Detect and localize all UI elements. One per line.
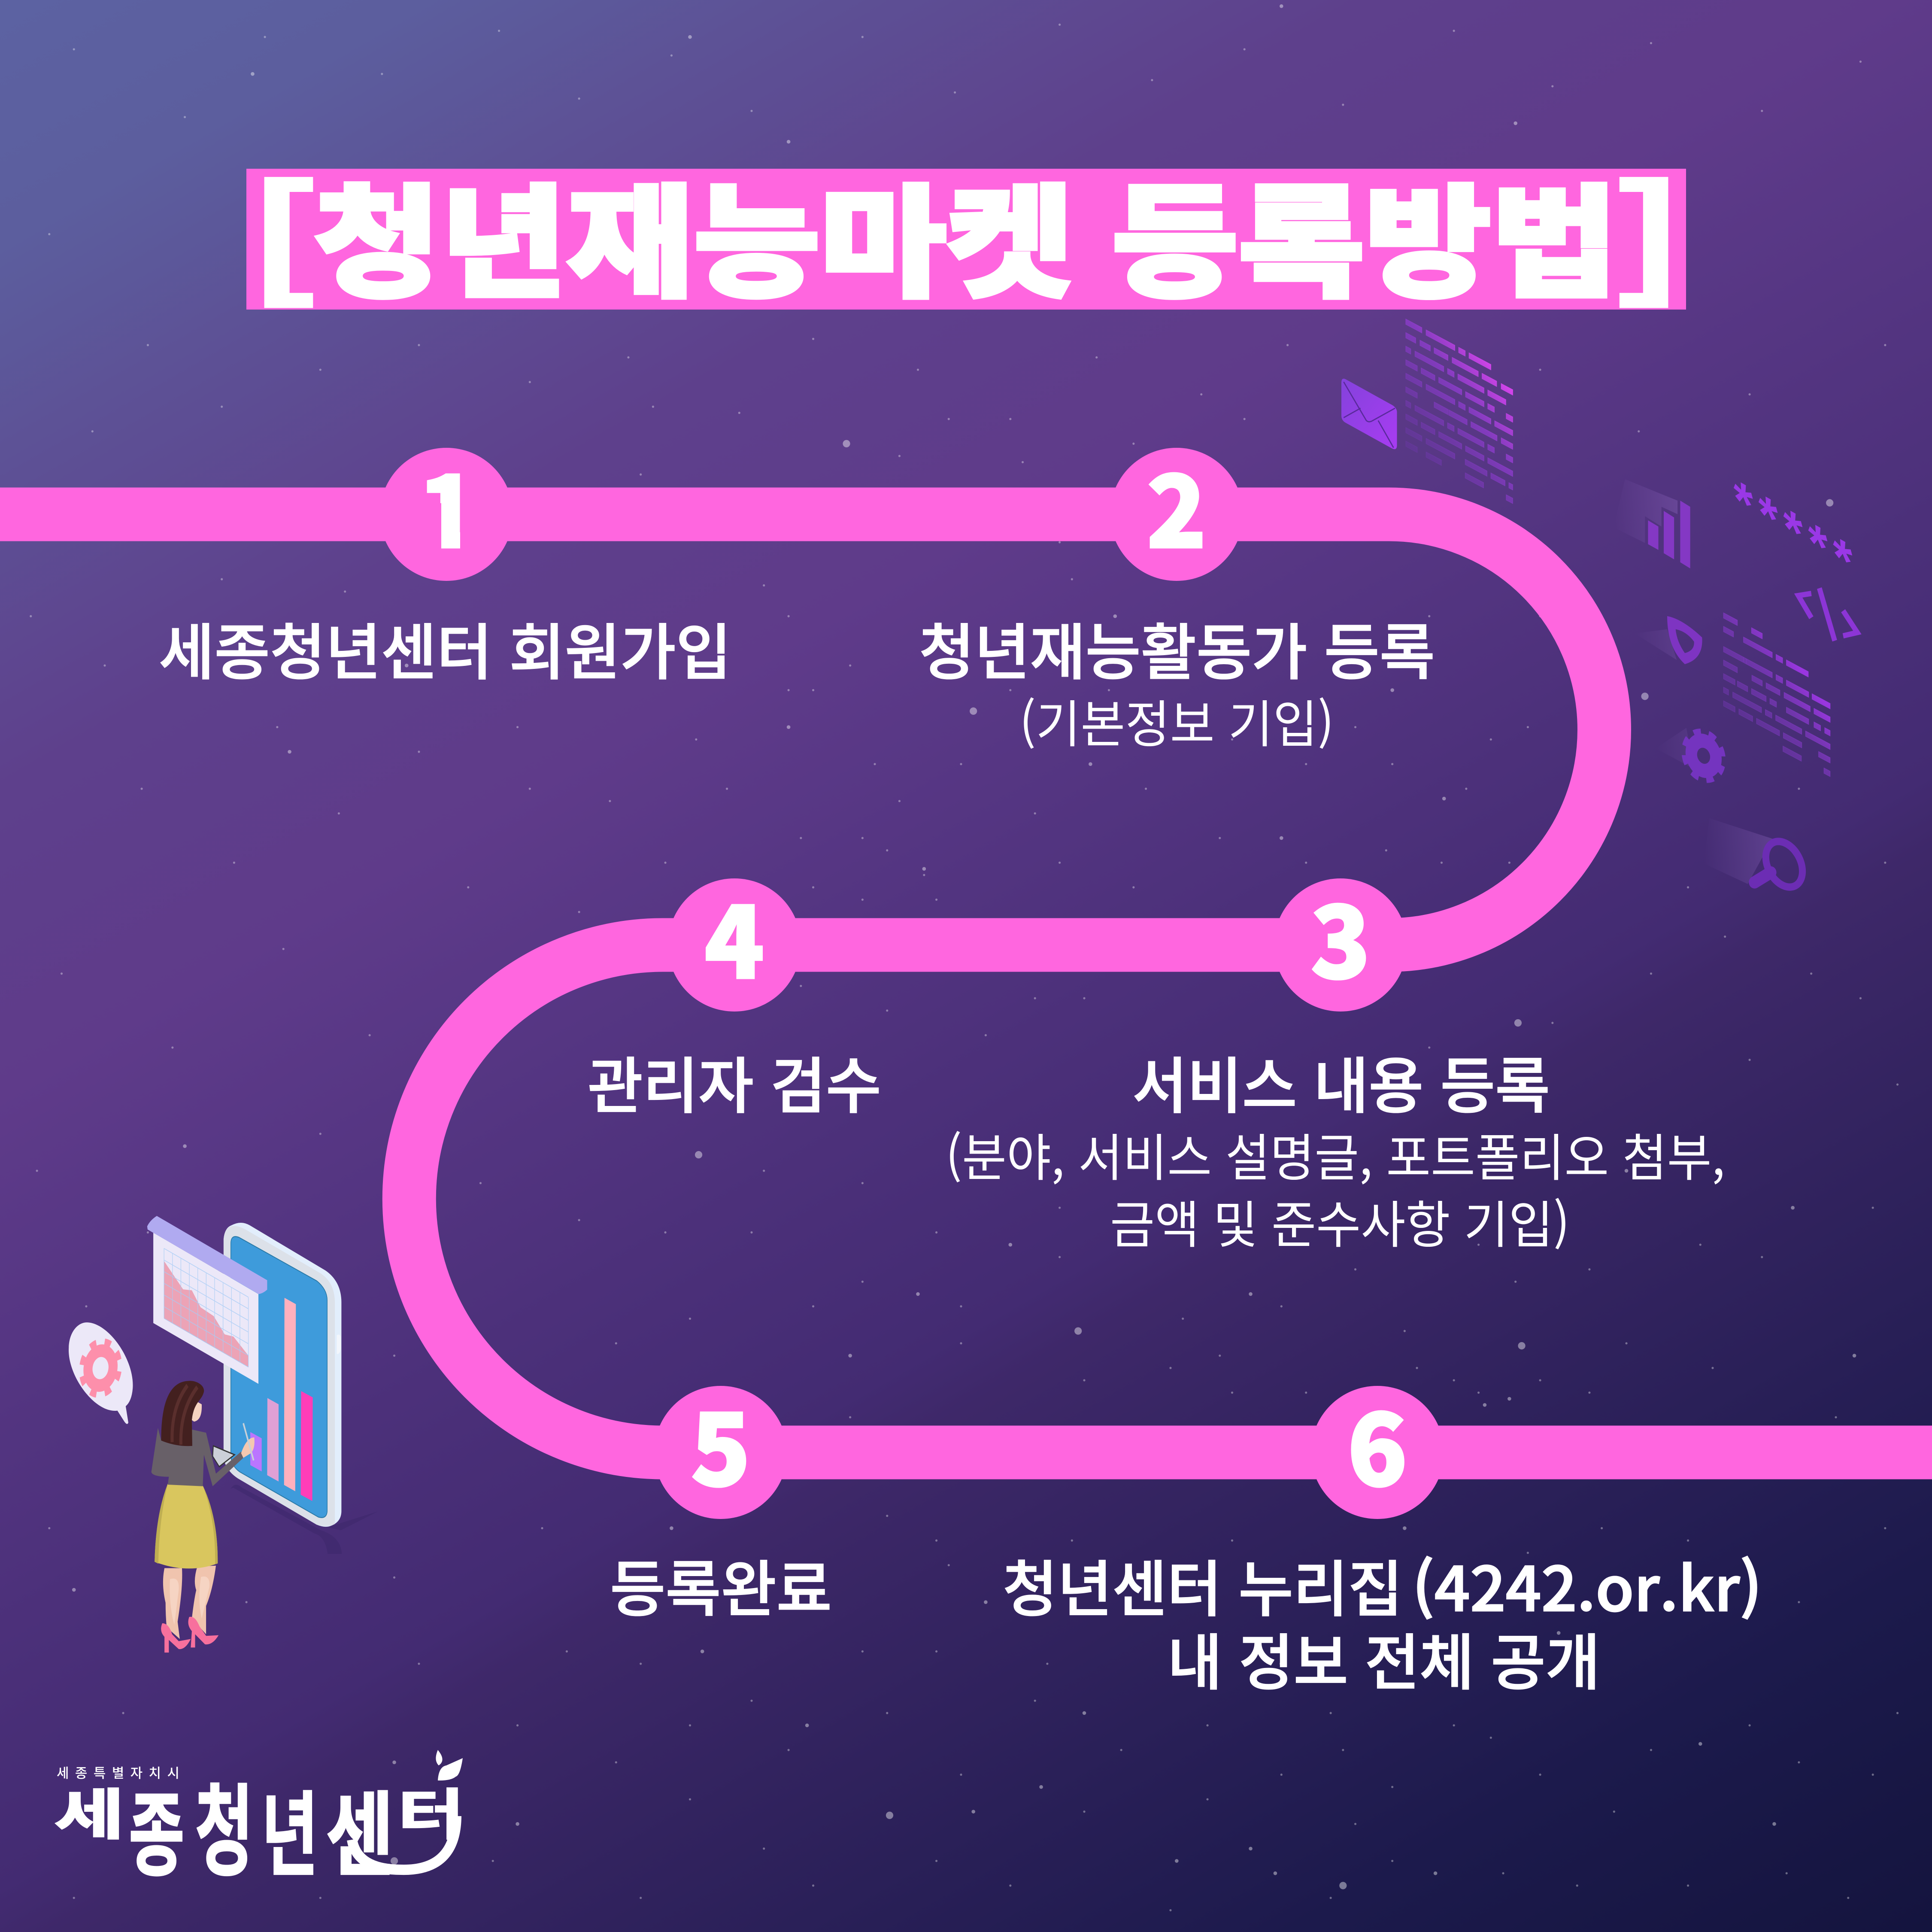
step 6: 6 — [1348, 1372, 1407, 1514]
isometric tech icons — [1341, 319, 1857, 894]
illustration: woman at tablet — [69, 1216, 378, 1653]
logo wordmark: 종 — [129, 1761, 185, 1894]
speech bubble with gear — [69, 1322, 133, 1424]
logo leaves — [436, 1750, 463, 1780]
title banner: [ — [256, 153, 314, 308]
icon: envelope — [1341, 379, 1397, 449]
icon: code brackets — [1798, 588, 1857, 641]
logo wordmark: 센 — [326, 1761, 394, 1894]
step 4: 4 — [705, 865, 764, 1006]
tablet shadow — [229, 1485, 378, 1554]
step 2: (기본정보 기입) — [1019, 683, 1334, 757]
logo wordmark: 청 — [195, 1751, 253, 1896]
step 4: 관리자 검수 — [588, 1037, 881, 1125]
step 2 — [919, 434, 1435, 757]
logo swoosh — [352, 1816, 456, 1870]
woman figure — [152, 1381, 255, 1653]
step 5: 5 — [691, 1372, 750, 1514]
step 4 — [588, 865, 881, 1125]
icon: shield — [1635, 616, 1702, 664]
step 3: 금액 및 준수사항 기입) — [1110, 1184, 1570, 1258]
step 3: 3 — [1311, 865, 1370, 1006]
pink winding path — [0, 514, 1932, 1452]
icon: asterisks: ***** — [1734, 467, 1853, 595]
logo wordmark — [54, 1751, 464, 1896]
step 3 — [946, 865, 1725, 1258]
step 1: 1 — [419, 434, 478, 576]
logo wordmark: 년 — [261, 1761, 318, 1894]
step 2: 2 — [1147, 434, 1206, 576]
step 5 — [610, 1372, 832, 1628]
tablet — [224, 1223, 341, 1527]
floating chart board — [147, 1216, 267, 1384]
step 3: 서비스 내용 등록 — [1132, 1037, 1550, 1125]
step 3: (분야, 서비스 설명글, 포트폴리오 첨부, — [946, 1117, 1725, 1191]
logo wordmark: 세 — [54, 1771, 124, 1850]
step 6: 청년센터 누리집 — [1003, 1540, 1403, 1628]
icon: magnifier — [1704, 818, 1810, 894]
screen bars — [250, 1298, 313, 1501]
code dashes block 2 — [1723, 613, 1830, 777]
step 6: 내 정보 전체 공개 — [1168, 1613, 1600, 1702]
logo wordmark: 터 — [397, 1771, 464, 1850]
title banner: ] — [1619, 153, 1677, 308]
step 2: 청년재능활동가 등록 — [919, 603, 1435, 692]
title banner: 청년재능마켓 등록방법 — [314, 145, 1618, 322]
logo small caption: 세종특별자치시 — [57, 1762, 179, 1782]
logo: Sejong Youth Center — [54, 1750, 464, 1896]
code dashes block 1 — [1406, 319, 1513, 504]
icon: gear — [1656, 726, 1729, 786]
step 6 — [1003, 1372, 1762, 1702]
step 1: 세종청년센터 회원가입 — [159, 603, 731, 692]
step 6: (4242.or.kr) — [1412, 1540, 1762, 1628]
step 1 — [159, 434, 731, 692]
icon: bar chart — [1614, 479, 1690, 568]
step 5: 등록완료 — [610, 1540, 832, 1628]
